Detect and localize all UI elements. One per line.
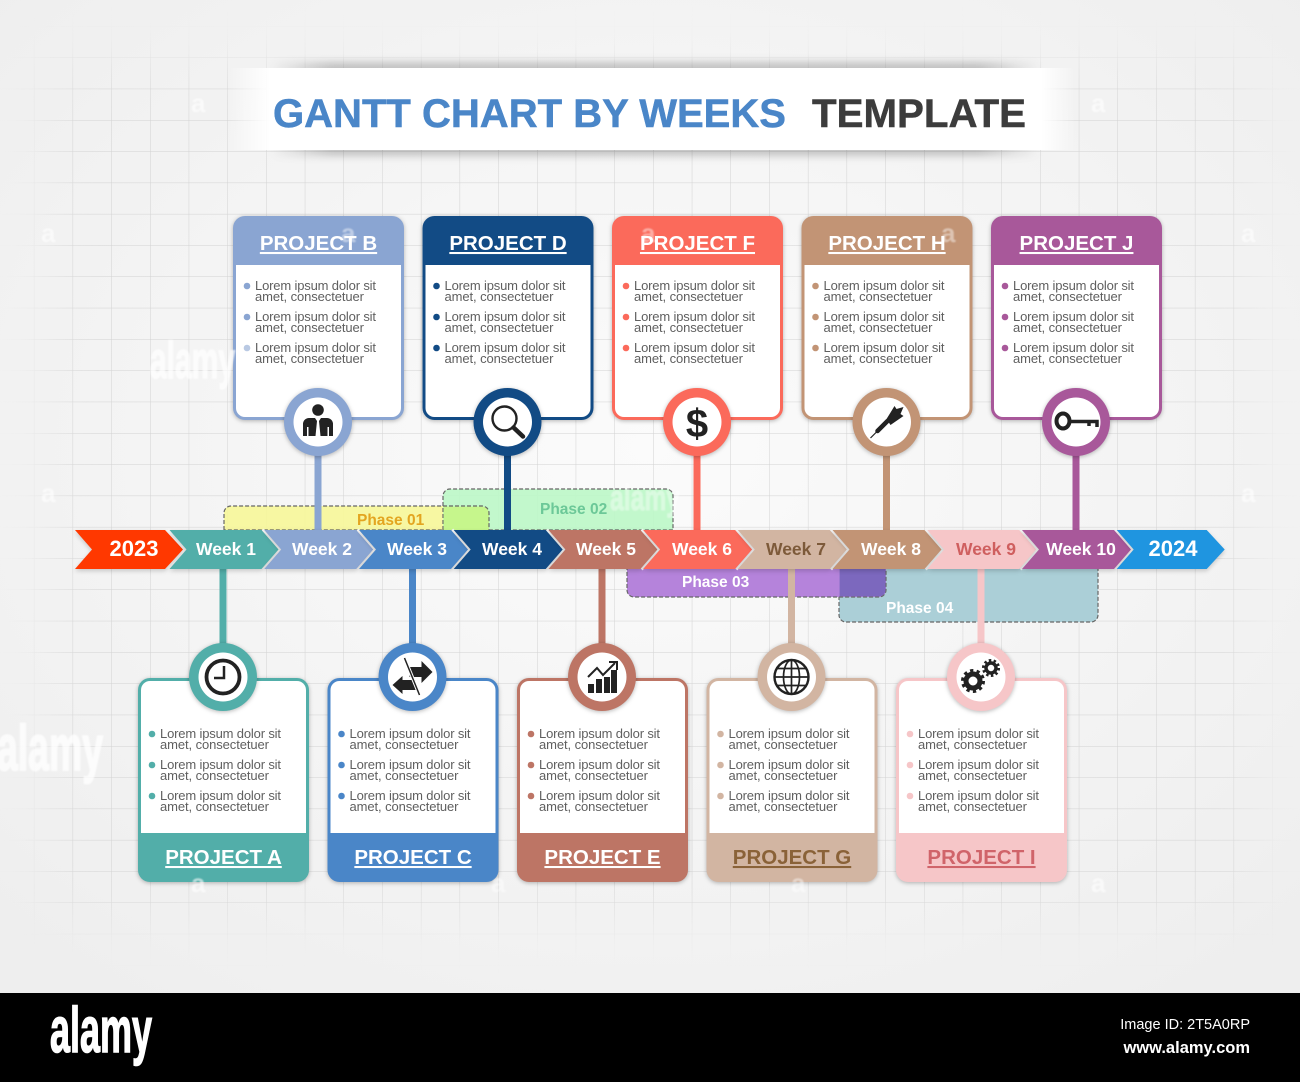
list: amet, consectetuer xyxy=(539,737,649,752)
icon: globe xyxy=(758,643,826,711)
list xyxy=(717,726,850,814)
list: amet, consectetuer xyxy=(160,737,270,752)
list: amet, consectetuer xyxy=(444,289,554,304)
list: amet, consectetuer xyxy=(728,737,838,752)
2023 arrow xyxy=(75,530,183,569)
list: Lorem ipsum dolor sit xyxy=(824,340,945,355)
phase 01: Phase 01 xyxy=(357,512,425,529)
watermarks: a xyxy=(791,868,806,898)
week 1 xyxy=(170,530,278,569)
icon: growth chart xyxy=(568,643,636,711)
panel: project B xyxy=(233,216,404,420)
title: dark part: TEMPLATE xyxy=(812,92,1026,136)
icon: person xyxy=(284,388,352,456)
2024 arrow xyxy=(1117,530,1225,569)
watermarks: alamy xyxy=(0,712,103,784)
watermarks: a xyxy=(41,478,56,508)
panel: project J xyxy=(991,216,1162,420)
list: Lorem ipsum dolor sit xyxy=(1013,278,1134,293)
watermarks: a xyxy=(1091,868,1106,898)
list: amet, consectetuer xyxy=(728,799,838,814)
list xyxy=(1002,278,1134,366)
list: amet, consectetuer xyxy=(634,289,744,304)
panel: project F: PROJECT F xyxy=(640,232,755,255)
panel: project G: PROJECT G xyxy=(733,846,851,869)
watermarks: a xyxy=(191,88,206,118)
list: amet, consectetuer xyxy=(1013,289,1123,304)
list: amet, consectetuer xyxy=(824,351,933,366)
list: Lorem ipsum dolor sit xyxy=(539,788,660,803)
list: Lorem ipsum dolor sit xyxy=(918,726,1039,741)
title banner xyxy=(228,62,1075,156)
panel: project H xyxy=(802,216,972,420)
list: Lorem ipsum dolor sit xyxy=(160,757,281,772)
list: amet, consectetuer xyxy=(539,768,649,783)
week 9 xyxy=(927,530,1036,569)
panel: project D xyxy=(422,216,594,420)
list: Lorem ipsum dolor sit xyxy=(255,309,376,324)
list: amet, consectetuer xyxy=(255,351,365,366)
2024 arrow: 2024 xyxy=(1149,536,1198,561)
icon: magnifier xyxy=(474,388,542,456)
list: Lorem ipsum dolor sit xyxy=(634,309,755,324)
list: amet, consectetuer xyxy=(539,799,649,814)
panel: project E: PROJECT E xyxy=(544,846,661,869)
list xyxy=(528,726,660,814)
list: amet, consectetuer xyxy=(1013,351,1123,366)
stems xyxy=(220,450,1080,652)
icon: key xyxy=(1042,388,1110,456)
list xyxy=(149,726,281,814)
list: Lorem ipsum dolor sit xyxy=(634,278,755,293)
week 10: Week 10 xyxy=(1046,539,1116,559)
timeline xyxy=(75,530,1225,569)
list xyxy=(244,278,376,366)
website: www.alamy.com xyxy=(1122,1039,1250,1057)
list xyxy=(338,726,471,814)
list: Lorem ipsum dolor sit xyxy=(1013,340,1134,355)
panel: project A xyxy=(138,678,309,882)
list: amet, consectetuer xyxy=(444,351,554,366)
week 6 xyxy=(643,530,752,569)
list: Lorem ipsum dolor sit xyxy=(634,340,755,355)
phase 02: Phase 02 xyxy=(540,501,607,518)
list: Lorem ipsum dolor sit xyxy=(539,757,660,772)
watermarks: alamy xyxy=(150,332,235,390)
week 5 xyxy=(548,530,657,569)
watermarks xyxy=(0,88,1256,898)
list: amet, consectetuer xyxy=(350,799,459,814)
list: Lorem ipsum dolor sit xyxy=(824,278,945,293)
panel: project C: PROJECT C xyxy=(354,846,472,869)
list: Lorem ipsum dolor sit xyxy=(444,278,566,293)
week 10 xyxy=(1022,530,1131,569)
list: amet, consectetuer xyxy=(350,737,459,752)
list xyxy=(907,726,1039,814)
list: Lorem ipsum dolor sit xyxy=(350,757,471,772)
week 5: Week 5 xyxy=(576,539,636,559)
watermarks: alamy xyxy=(610,477,680,518)
icon: dollar xyxy=(663,388,731,456)
phase 02 xyxy=(443,489,673,530)
icon: dart xyxy=(852,388,920,456)
panel: project I: PROJECT I xyxy=(927,846,1036,869)
week 6: Week 6 xyxy=(672,539,732,559)
watermarks: a xyxy=(191,868,206,898)
list: amet, consectetuer xyxy=(444,320,554,335)
panel: project B: PROJECT B xyxy=(260,232,377,255)
list: amet, consectetuer xyxy=(160,799,270,814)
watermarks: a xyxy=(491,868,506,898)
icon: gears xyxy=(947,643,1015,711)
panel: project H: PROJECT H xyxy=(828,232,946,255)
list: amet, consectetuer xyxy=(160,768,270,783)
list: Lorem ipsum dolor sit xyxy=(918,757,1039,772)
list xyxy=(433,278,566,366)
list: amet, consectetuer xyxy=(918,737,1028,752)
list: amet, consectetuer xyxy=(634,320,744,335)
list: amet, consectetuer xyxy=(918,799,1028,814)
panel: project D: PROJECT D xyxy=(449,232,567,255)
list: Lorem ipsum dolor sit xyxy=(728,757,850,772)
phase 04 xyxy=(839,560,1098,622)
list: Lorem ipsum dolor sit xyxy=(160,726,281,741)
panel: project I xyxy=(896,678,1067,882)
watermarks: a xyxy=(1241,478,1256,508)
list xyxy=(812,278,945,366)
phase 01 xyxy=(224,506,489,530)
list: Lorem ipsum dolor sit xyxy=(444,309,566,324)
list: Lorem ipsum dolor sit xyxy=(444,340,566,355)
list: Lorem ipsum dolor sit xyxy=(255,278,376,293)
background xyxy=(29,44,1271,938)
week 2 xyxy=(264,530,373,569)
week 8: Week 8 xyxy=(861,539,921,559)
list: amet, consectetuer xyxy=(350,768,459,783)
footer logo: alamy xyxy=(50,994,152,1066)
list: amet, consectetuer xyxy=(824,289,933,304)
phase 03: Phase 03 xyxy=(682,574,750,591)
phase bars xyxy=(224,489,1098,622)
list: Lorem ipsum dolor sit xyxy=(918,788,1039,803)
title: blue part: GANTT CHART BY WEEKS xyxy=(273,92,786,136)
watermarks: a xyxy=(941,218,956,248)
list: Lorem ipsum dolor sit xyxy=(350,788,471,803)
panel: project F xyxy=(612,216,783,420)
list: Lorem ipsum dolor sit xyxy=(824,309,945,324)
week 8 xyxy=(832,530,942,569)
watermarks: a xyxy=(41,218,56,248)
week 4: Week 4 xyxy=(482,539,542,559)
list: Lorem ipsum dolor sit xyxy=(728,726,850,741)
week 4 xyxy=(454,530,563,569)
list: amet, consectetuer xyxy=(634,351,744,366)
list: amet, consectetuer xyxy=(1013,320,1123,335)
phase 04: Phase 04 xyxy=(886,600,954,617)
icon: dollar: $ xyxy=(686,402,708,446)
week 3: Week 3 xyxy=(387,539,447,559)
panel: project J: PROJECT J xyxy=(1020,232,1133,255)
week 1: Week 1 xyxy=(196,539,256,559)
list: Lorem ipsum dolor sit xyxy=(350,726,471,741)
panel: project E xyxy=(517,678,688,882)
panel: project C xyxy=(328,678,498,882)
week 2: Week 2 xyxy=(292,539,352,559)
week 9: Week 9 xyxy=(956,539,1016,559)
icon: arrows xyxy=(378,643,446,711)
footer bar xyxy=(0,993,1300,1082)
phase 03 xyxy=(627,560,886,597)
list: Lorem ipsum dolor sit xyxy=(160,788,281,803)
watermarks: a xyxy=(641,218,656,248)
panel: project A: PROJECT A xyxy=(165,846,282,869)
watermarks: a xyxy=(1091,88,1106,118)
week 3 xyxy=(359,530,468,569)
panel: project G xyxy=(706,678,878,882)
list: amet, consectetuer xyxy=(918,768,1028,783)
watermarks: a xyxy=(1241,218,1256,248)
list: amet, consectetuer xyxy=(255,289,365,304)
list: amet, consectetuer xyxy=(255,320,365,335)
list: Lorem ipsum dolor sit xyxy=(1013,309,1134,324)
week 7: Week 7 xyxy=(766,539,826,559)
image id: Image ID: 2T5A0RP xyxy=(1120,1017,1250,1033)
list: Lorem ipsum dolor sit xyxy=(255,340,376,355)
2023 arrow: 2023 xyxy=(110,536,158,561)
list xyxy=(623,278,755,366)
list: Lorem ipsum dolor sit xyxy=(728,788,850,803)
list: Lorem ipsum dolor sit xyxy=(539,726,660,741)
icon: clock xyxy=(189,643,257,711)
week 7 xyxy=(738,530,847,569)
list: amet, consectetuer xyxy=(824,320,933,335)
watermarks: a xyxy=(341,218,356,248)
list: amet, consectetuer xyxy=(728,768,838,783)
